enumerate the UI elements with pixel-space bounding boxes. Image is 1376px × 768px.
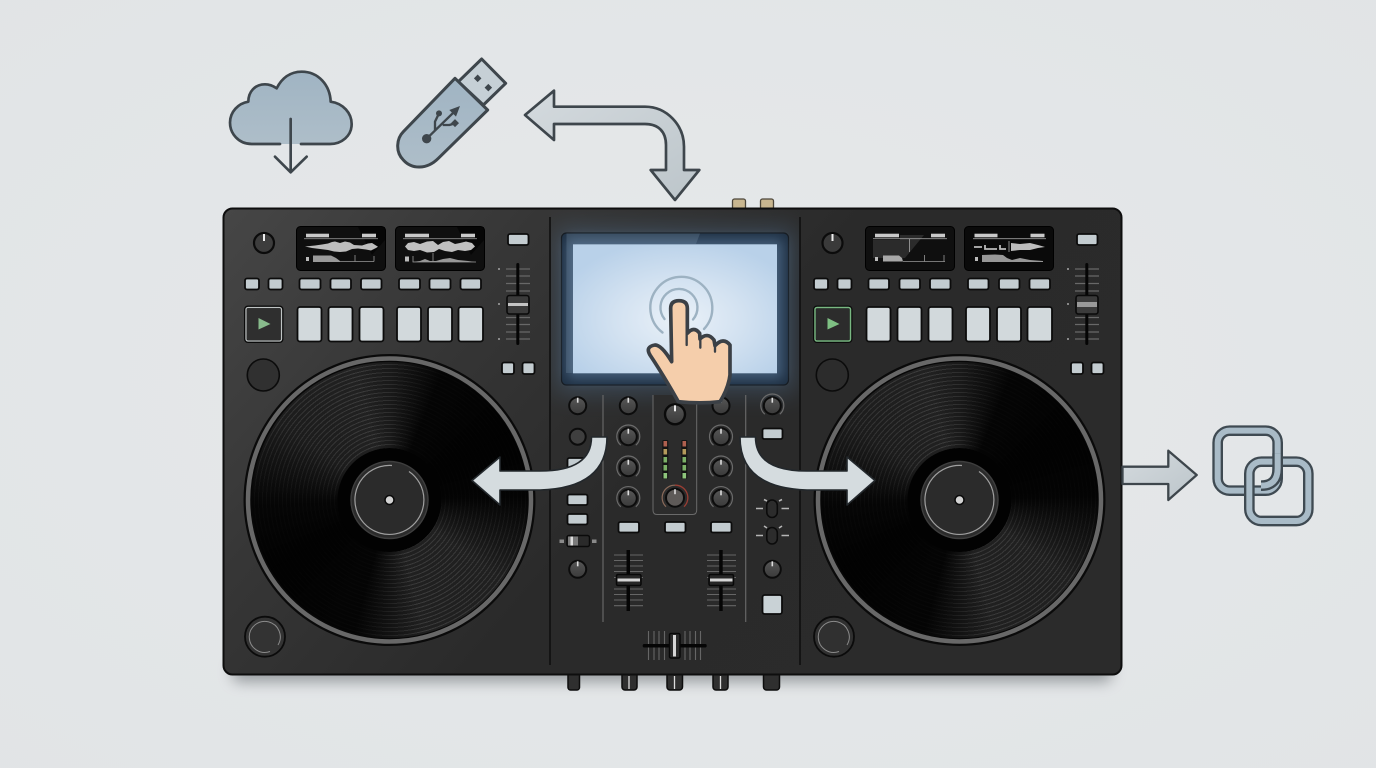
arrow: screen to right deck <box>740 437 875 505</box>
arrow: output to link <box>1122 451 1197 500</box>
pads: left performance pads <box>298 307 483 342</box>
mixer master box <box>653 395 697 514</box>
switch: left slide toggle <box>560 536 596 546</box>
buttons: right sync pair <box>1071 362 1104 374</box>
level meters <box>662 440 687 479</box>
icon: pointing hand <box>648 301 730 403</box>
buttons: mixer buttons <box>568 428 782 532</box>
fader: channel B <box>707 550 736 611</box>
section dividers <box>550 217 800 665</box>
bezel inner glow <box>567 239 783 379</box>
display: left deck 1 <box>296 226 386 270</box>
jog wheel: right platter <box>814 354 1106 646</box>
button row: left small buttons <box>245 278 481 290</box>
display surface <box>573 244 777 373</box>
arrow: screen to left deck <box>472 437 607 505</box>
fader: right pitch <box>1067 263 1099 345</box>
knob: left browse <box>254 233 274 253</box>
switches: right filter toggles <box>756 500 789 544</box>
knob: right round button <box>816 359 848 391</box>
panel: left deck <box>244 226 536 657</box>
fader: left pitch <box>498 263 530 345</box>
button: right play <box>814 307 851 342</box>
knob: master <box>665 404 685 424</box>
buttons: left sync pair <box>502 362 534 374</box>
display: left deck 2 <box>396 226 484 270</box>
rear connectors <box>732 199 774 209</box>
icon: usb drive <box>398 59 506 167</box>
icon: cloud download <box>230 72 352 172</box>
knob: left round button <box>247 359 279 391</box>
bezel highlight <box>566 234 700 373</box>
knob: left lower <box>569 561 586 578</box>
crossfader <box>643 631 707 660</box>
knob: right browse <box>822 233 842 253</box>
panel: mixer <box>560 394 789 660</box>
display: right deck 2 <box>964 226 1054 270</box>
panel: right deck <box>814 226 1106 657</box>
knobs: left column <box>569 397 586 445</box>
button: left top right <box>508 234 528 245</box>
touch ripples <box>650 277 712 332</box>
panel: touch screen <box>562 233 788 403</box>
arrow: usb to screen <box>525 91 699 200</box>
icon: linked squares <box>1218 431 1308 521</box>
knob: headphone level <box>662 485 688 507</box>
knob: right lower <box>764 561 781 578</box>
fader: channel A <box>614 550 643 611</box>
screen glow <box>556 228 796 393</box>
knob: left bottom dial <box>245 617 285 657</box>
button: left play <box>246 307 282 342</box>
jog wheel: left platter <box>244 354 536 646</box>
screen bezel <box>562 233 788 385</box>
knob: right bottom dial <box>814 617 854 657</box>
button row: right small buttons <box>814 278 1050 290</box>
button: right top right <box>1077 234 1098 245</box>
chassis shadow <box>232 662 1112 682</box>
button: right square <box>762 595 782 614</box>
knob: top right mixer <box>761 394 784 414</box>
display: right deck 1 <box>866 226 954 270</box>
knobs: channel B EQ <box>710 397 732 507</box>
front connectors <box>568 670 780 690</box>
knobs: channel A EQ <box>617 397 640 507</box>
mixer channel dividers <box>603 395 746 622</box>
pads: right performance pads <box>866 307 1052 342</box>
panel: controller chassis <box>224 208 1122 674</box>
